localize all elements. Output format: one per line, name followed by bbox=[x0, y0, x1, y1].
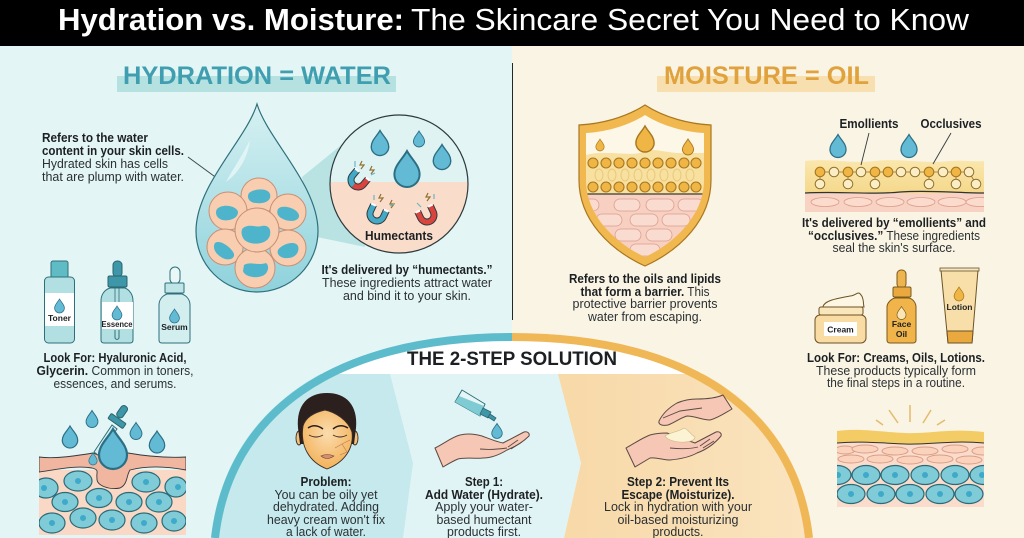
text: problem: You can be oily yet bbox=[274, 487, 378, 502]
text: step 2 bbox=[604, 474, 753, 538]
text: look for moisturizers: These products typically form bbox=[816, 363, 976, 378]
text: step 1 bbox=[425, 474, 543, 538]
title bar bbox=[0, 0, 1024, 46]
magnet 2 bbox=[368, 204, 387, 223]
text: step 2: Escape (Moisturize). bbox=[622, 487, 734, 502]
text: step 2: Lock in hydration with your bbox=[604, 499, 753, 514]
text: humectants delivery: It's delivered by “humectants.” bbox=[322, 262, 492, 277]
text: hydration definition: content in your skin cells. bbox=[42, 143, 184, 158]
magnet 1 bbox=[348, 169, 369, 190]
text: step 2: oil-based moisturizing bbox=[618, 512, 738, 527]
illustration: emollients and occlusives layer bbox=[805, 116, 994, 212]
text: problem: dehydrated. Adding bbox=[273, 499, 379, 514]
arch outline bbox=[215, 337, 809, 538]
heading: THE 2-STEP SOLUTION bbox=[407, 349, 617, 370]
icon: toner bottle bbox=[44, 261, 74, 343]
text: problem: heavy cream won't fix bbox=[267, 512, 385, 527]
text: hydration definition bbox=[42, 130, 184, 184]
text: look for hydrators: essences, and serums. bbox=[54, 376, 176, 391]
text: look for moisturizers bbox=[807, 350, 985, 390]
heading: hydration equals water: HYDRATION = WATER bbox=[123, 62, 391, 90]
text: look for hydrators: Look For: Hyaluronic Acid, bbox=[44, 350, 186, 365]
arch background panels bbox=[211, 334, 813, 538]
icon: face oil bottle: Face bbox=[892, 319, 911, 329]
icon: serum bottle dripping on hand bbox=[435, 390, 529, 467]
illustration: emollients and occlusives layer: Emollients bbox=[840, 116, 898, 131]
text: emollients delivery: seal the skin's surface. bbox=[832, 240, 956, 255]
text: step 1: Add Water (Hydrate). bbox=[425, 487, 543, 502]
panel: humectants magnifier: Humectants bbox=[365, 228, 433, 243]
text: emollients delivery bbox=[802, 215, 986, 255]
title bar: Hydration vs. Moisture: bbox=[58, 2, 404, 37]
sparks bbox=[360, 161, 430, 208]
icon: lotion tube: Lotion bbox=[947, 302, 972, 312]
text: step 1: based humectant bbox=[436, 512, 532, 527]
text: look for hydrators bbox=[36, 350, 194, 391]
icon: hands with moisturizer bbox=[626, 395, 732, 467]
panel: hydration background bbox=[0, 46, 512, 538]
center divider bbox=[512, 63, 514, 320]
icon: cream jar: Cream bbox=[827, 324, 854, 334]
icon: barrier shield bbox=[575, 105, 711, 266]
text: emollients delivery: “occlusives.” These ingredients bbox=[808, 228, 980, 243]
icon: serum bottle bbox=[159, 267, 190, 343]
icon: cream jar bbox=[815, 293, 866, 343]
text: moisture definition: water from escaping. bbox=[587, 309, 702, 324]
text: step 2: Step 2: Prevent Its bbox=[627, 474, 729, 489]
text: humectants delivery bbox=[322, 262, 493, 303]
icon: essence dropper bottle bbox=[101, 261, 133, 343]
magnifier cone bbox=[302, 142, 365, 247]
heading: moisture equals oil: MOISTURE = OIL bbox=[664, 62, 869, 90]
illustration: dropper on skin bbox=[34, 404, 187, 535]
icon: face oil bottle: Oil bbox=[896, 329, 907, 339]
title bar: The Skincare Secret You Need to Know bbox=[411, 2, 970, 37]
icon: face with dry patch bbox=[296, 393, 358, 469]
text: humectants delivery: and bind it to your skin. bbox=[343, 288, 471, 303]
icon: face oil bottle bbox=[887, 270, 916, 343]
panel: the 2-step solution bbox=[211, 333, 813, 538]
text: problem: Problem: bbox=[300, 474, 352, 489]
text: hydration definition: Hydrated skin has cells bbox=[42, 156, 168, 171]
text: look for moisturizers: the final steps in a routine. bbox=[827, 375, 965, 390]
text: moisture definition bbox=[569, 271, 721, 324]
callout line: definition to water drop bbox=[188, 157, 229, 187]
panel: moisture background bbox=[512, 46, 1024, 538]
text: moisture definition: protective barrier provents bbox=[572, 296, 718, 311]
cells bbox=[207, 178, 306, 288]
text: problem bbox=[267, 474, 385, 538]
text: step 1: Apply your water- bbox=[435, 499, 533, 514]
illustration: emollients and occlusives layer: Occlusives bbox=[920, 116, 982, 131]
text: humectants delivery: These ingredients attract water bbox=[322, 275, 493, 290]
text: hydration definition: that are plump with water. bbox=[42, 169, 184, 184]
text: hydration definition: Refers to the water bbox=[42, 130, 148, 145]
text: look for moisturizers: Look For: Creams, Oils, Lotions. bbox=[807, 350, 985, 365]
icon: essence dropper bottle: Essence bbox=[102, 319, 133, 329]
text: moisture definition: that form a barrier. This bbox=[580, 284, 710, 299]
icon: lotion tube bbox=[940, 268, 979, 343]
illustration: sealed skin layers bbox=[837, 405, 984, 507]
text: emollients delivery: It's delivered by “emollients” and bbox=[802, 215, 986, 230]
text: moisture definition: Refers to the oils and lipids bbox=[569, 271, 721, 286]
magnet 3 bbox=[417, 205, 436, 224]
panel: humectants magnifier bbox=[330, 115, 468, 254]
icon: large water drop with skin cells bbox=[196, 104, 318, 292]
icon: toner bottle: Toner bbox=[48, 313, 72, 323]
icon: serum bottle: Serum bbox=[161, 322, 188, 332]
text: step 1: Step 1: bbox=[465, 474, 503, 489]
text: look for hydrators: Glycerin. Common in toners, bbox=[36, 363, 194, 378]
